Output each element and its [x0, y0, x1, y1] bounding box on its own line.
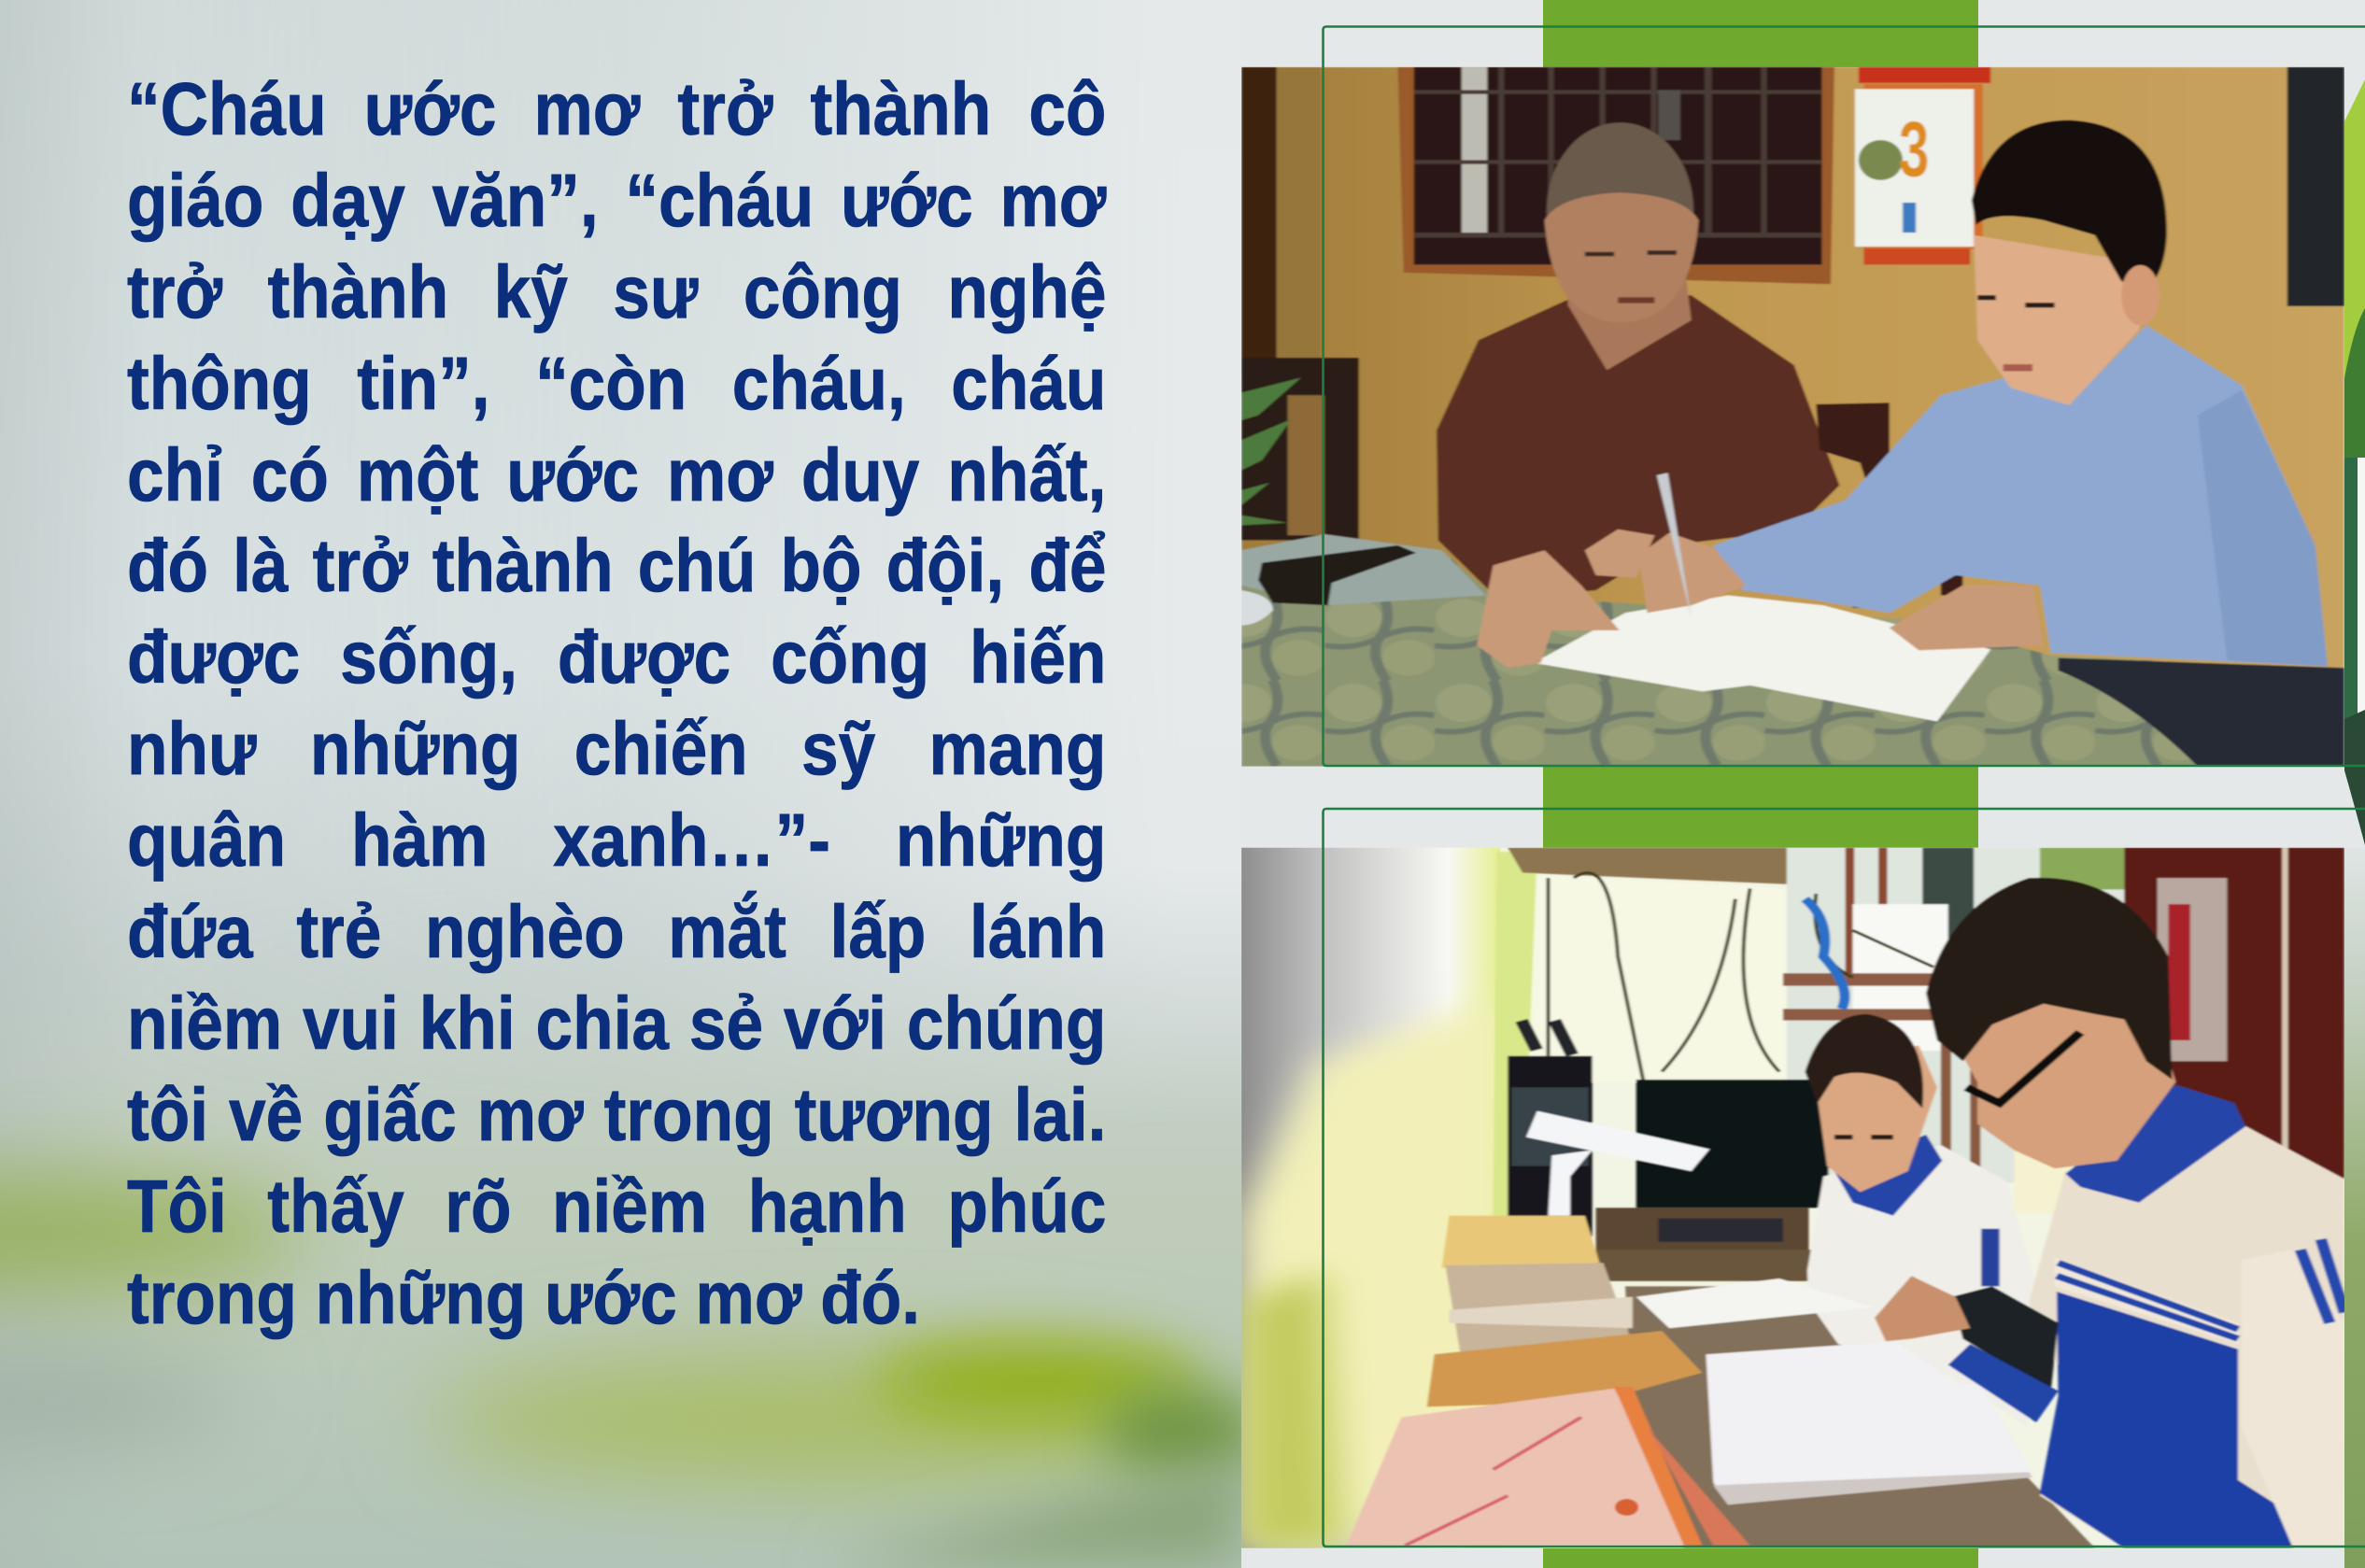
- quote text block: [127, 67, 1107, 1339]
- quote text block: thông tin”, “còn cháu, cháu: [127, 342, 1106, 425]
- pink book: [1346, 1387, 1750, 1546]
- photo: nun and boy studying: [1241, 67, 2344, 767]
- desk lamp: [1526, 1111, 1709, 1216]
- desk: [1625, 1286, 2095, 1548]
- quote text block: được sống, được cống hiến: [127, 615, 1106, 699]
- shelf: [1507, 848, 1789, 885]
- quote text block: chỉ có một ước mơ duy nhất,: [127, 433, 1106, 516]
- wall calendar: [1855, 67, 1990, 264]
- small boy: [1805, 1014, 2036, 1428]
- boy shirt: [1713, 325, 2328, 667]
- monitor: [1596, 1080, 1829, 1281]
- window: [1397, 67, 1834, 284]
- wall: [1500, 873, 1787, 1082]
- open book in front of small boy: [1636, 1278, 1875, 1328]
- notebook: [1706, 1341, 2032, 1504]
- hands: [1477, 530, 2044, 668]
- background: [0, 0, 1241, 1568]
- quote text block: quân hàm xanh…”- những: [127, 798, 1106, 882]
- quote text block: trở thành kỹ sư công nghệ: [127, 250, 1106, 333]
- open notebook: [1534, 595, 1990, 721]
- cables: [1548, 873, 1933, 1082]
- picture frame: [2287, 67, 2344, 306]
- computer tower: [1508, 1019, 1593, 1236]
- quote text block: trong những ước mơ đó.: [127, 1256, 920, 1339]
- photo: two students at a desk: [1241, 848, 2344, 1548]
- quote text block: đứa trẻ nghèo mắt lấp lánh: [127, 890, 1106, 973]
- right edge leaf: [2344, 79, 2365, 1568]
- quote text block: “Cháu ước mơ trở thành cô: [127, 67, 1106, 150]
- table: [1241, 534, 2344, 767]
- quote text block: giáo dạy văn”, “cháu ước mơ: [127, 159, 1106, 242]
- pen: [1657, 473, 1692, 618]
- quote text block: như những chiến sỹ mang: [127, 707, 1106, 790]
- wall calendar: 3: [1899, 106, 1929, 193]
- quote text block: đó là trở thành chú bộ đội, để: [127, 524, 1106, 607]
- top frame line: [1323, 26, 2365, 766]
- quote text block: Tôi thấy rõ niềm hạnh phúc: [127, 1165, 1106, 1248]
- boy head: [1972, 120, 2167, 405]
- writing hand: [1875, 1276, 1970, 1341]
- big boy jacket: [1948, 1085, 2344, 1548]
- quote text block: niềm vui khi chia sẻ với chúng: [127, 982, 1106, 1065]
- book stacks: [1427, 1216, 1702, 1406]
- wardrobe: [2124, 848, 2344, 1182]
- big boy head: [1926, 878, 2175, 1168]
- nun head: [1545, 122, 1699, 370]
- nun robe: [1437, 295, 1839, 598]
- left chair and plant: [1241, 358, 1359, 541]
- quote text block: tôi về giấc mơ trong tương lai.: [127, 1073, 1106, 1156]
- green accent bands: [1543, 0, 1978, 1568]
- middle chair: [1816, 403, 1890, 608]
- bottom frame line: [1323, 809, 2365, 1547]
- window grid: [1783, 848, 2124, 1213]
